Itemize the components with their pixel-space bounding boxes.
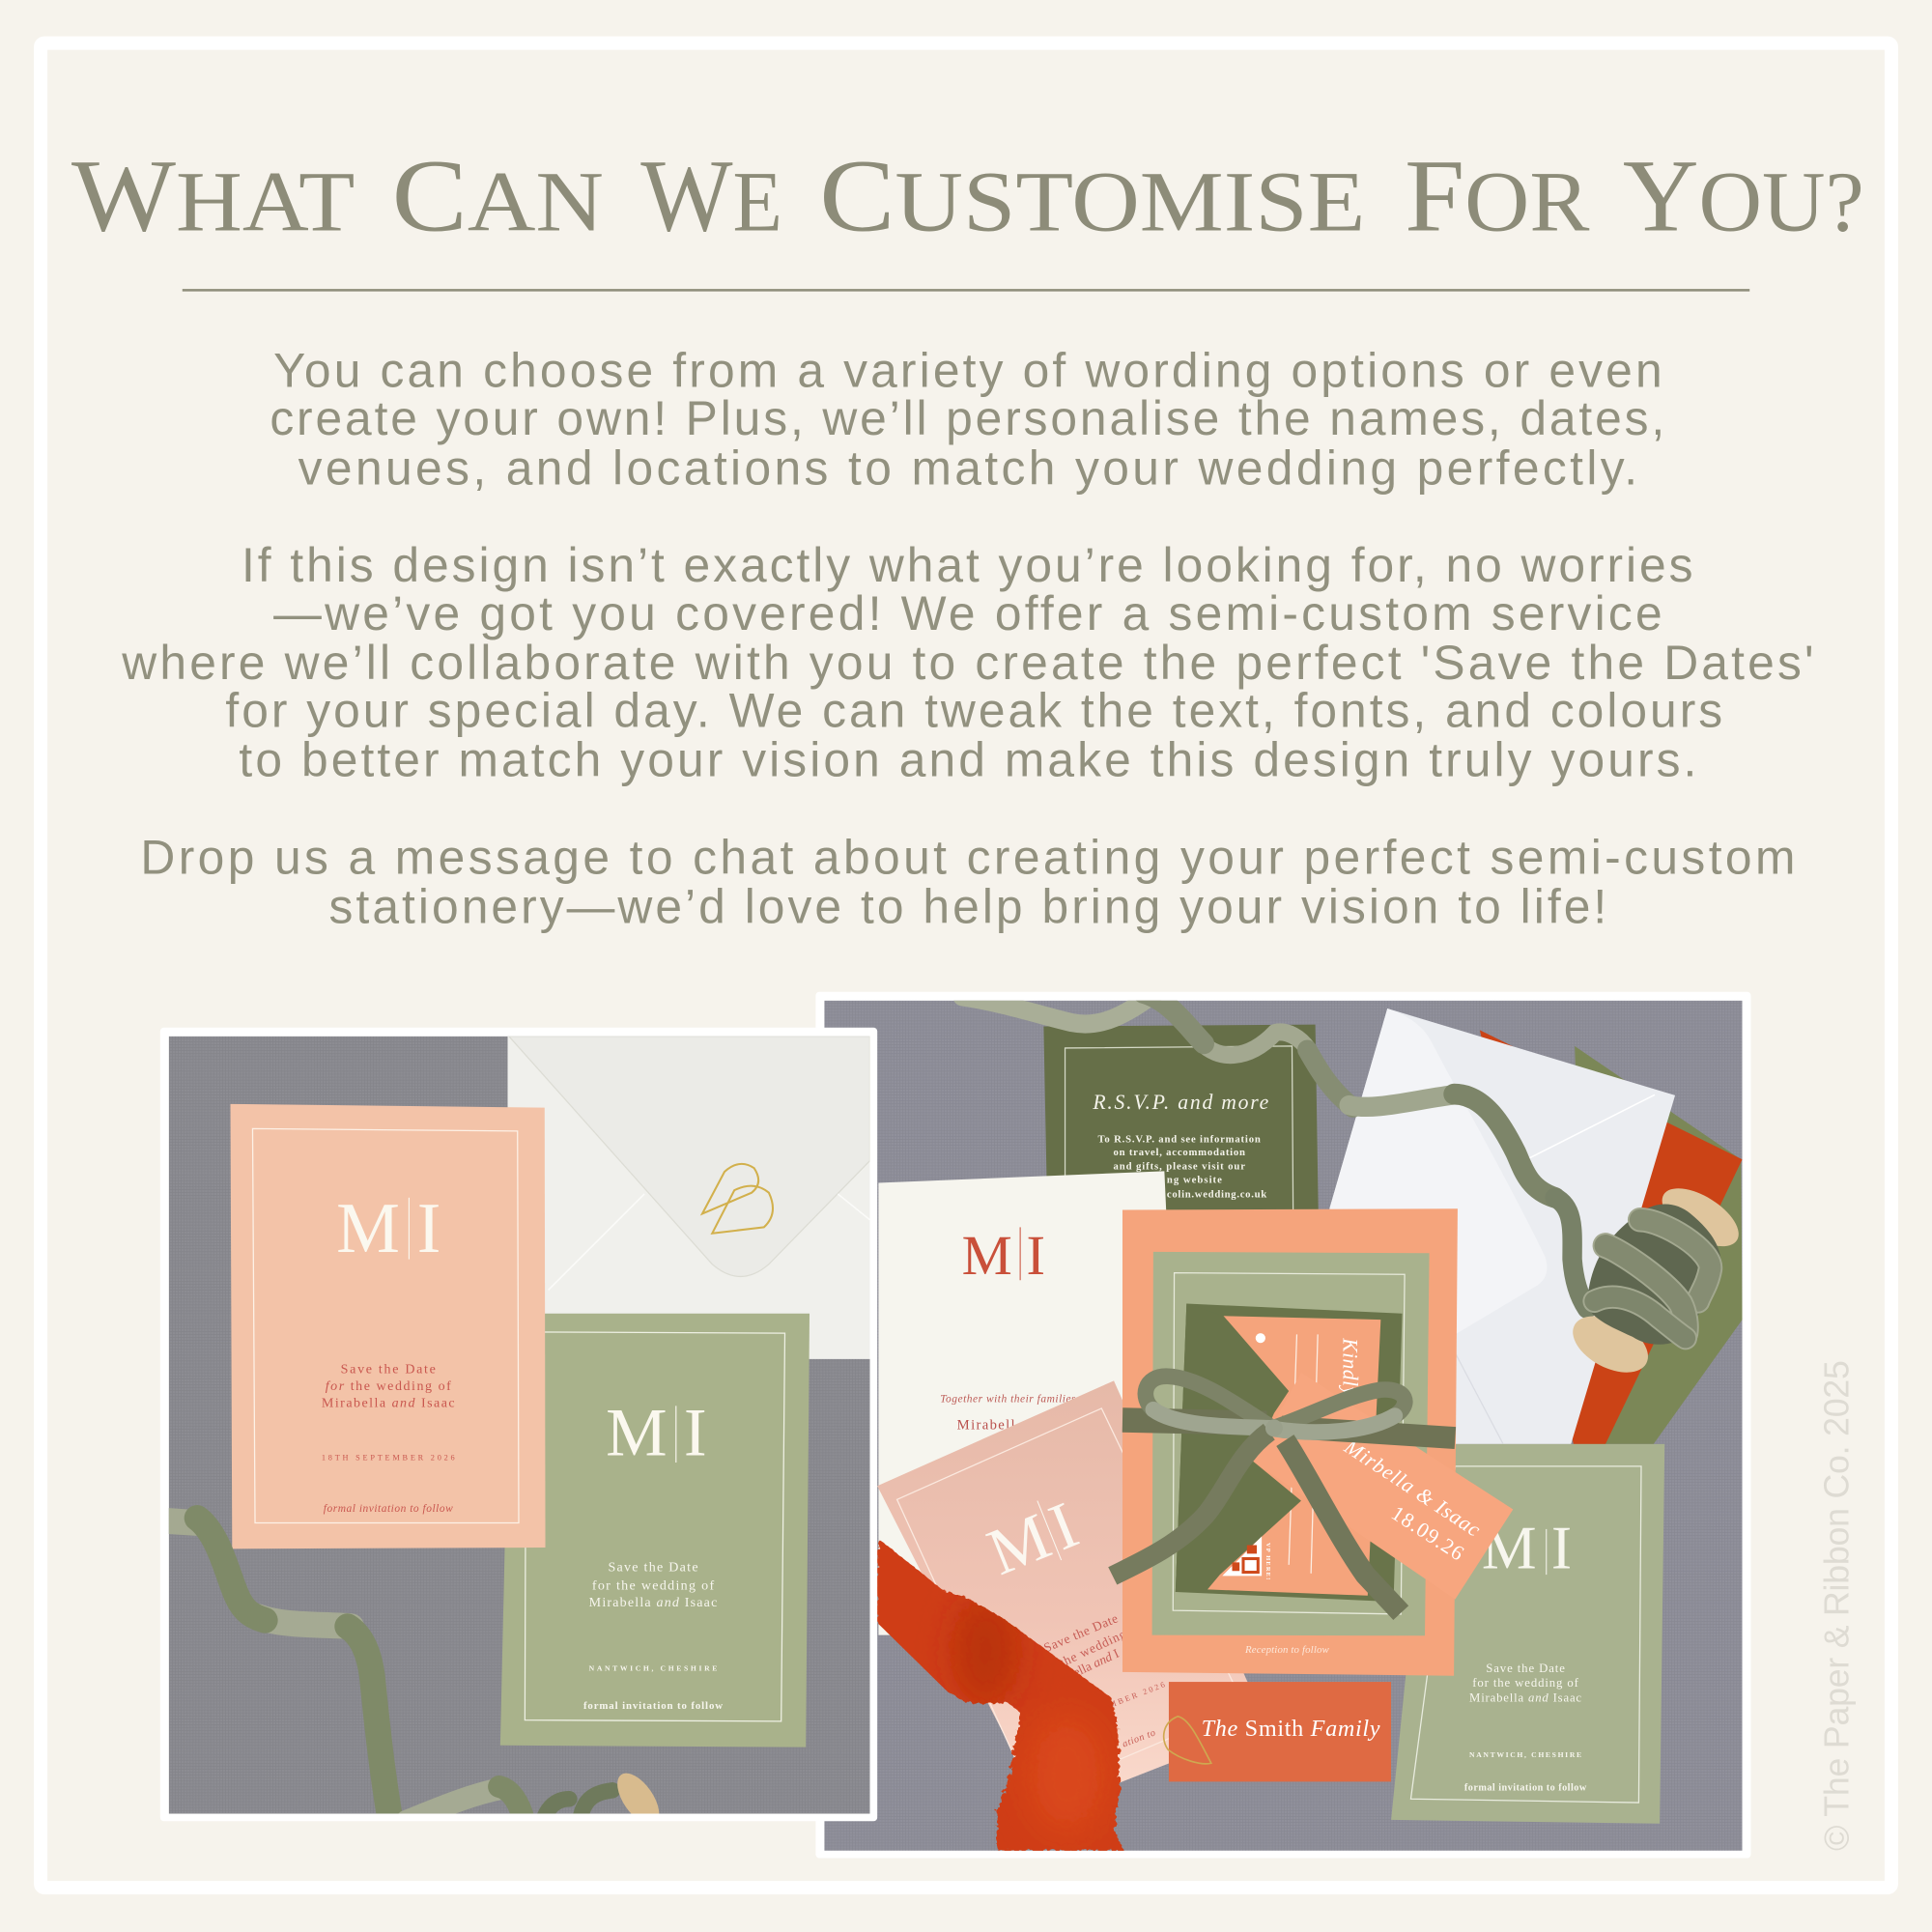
copyright watermark: © The Paper & Ribbon Co. 2025	[1817, 1360, 1856, 1851]
white invitation card: M	[962, 1224, 1012, 1287]
sage save the date card: Save the Date	[1486, 1662, 1565, 1675]
white envelope	[1329, 1009, 1675, 1444]
peach save the date card: Mirabella and Isaac	[322, 1396, 455, 1411]
photo: save the date pair	[160, 1028, 877, 1832]
text block: semi-custom paragraph	[121, 538, 1814, 787]
sage save the date card: Mirabella and Isaac	[1469, 1690, 1581, 1704]
green save the date card: formal invitation to follow	[583, 1700, 723, 1712]
QR code	[1222, 1537, 1262, 1576]
title	[71, 140, 1864, 254]
RSVP card	[1043, 1025, 1319, 1213]
title divider	[183, 289, 1749, 292]
sage save the date card: NANTWICH, CHESHIRE	[1469, 1750, 1581, 1759]
green save the date card: for the wedding of	[592, 1577, 714, 1593]
dark green pocket	[1176, 1303, 1403, 1602]
dark green flap	[1176, 1303, 1301, 1592]
text block: call to action	[140, 830, 1795, 933]
orange reply insert	[1208, 1316, 1380, 1596]
title: FOR	[1405, 140, 1590, 254]
text block: intro paragraph: venues, and locations to match your wedding perfectly.	[298, 440, 1637, 495]
sage save the date card: M	[1482, 1514, 1537, 1582]
pink save the date card: the wedding	[1057, 1626, 1128, 1669]
title: CUSTOMISE	[819, 140, 1365, 254]
orange backing card	[1122, 1208, 1458, 1676]
place card: The Smith Family	[1202, 1716, 1380, 1742]
text block: semi-custom paragraph: to better match your vision and make this design truly yours.	[239, 733, 1696, 787]
RSVP card: on travel, accommodation	[1114, 1147, 1245, 1158]
RSVP card: ng website	[1167, 1174, 1222, 1185]
text block: semi-custom paragraph: —we’ve got you covered! We offer a semi-custom service	[273, 586, 1662, 640]
red envelope	[1480, 1030, 1743, 1444]
ribbon spool	[1573, 1188, 1739, 1373]
pink save the date card: MBER 2026	[1108, 1680, 1166, 1710]
wooden spool	[617, 1774, 659, 1814]
top velvet ribbon	[962, 993, 1587, 1309]
RSVP card: To R.S.V.P. and see information	[1097, 1133, 1261, 1145]
peach save the date card: for the wedding of	[326, 1378, 451, 1394]
orange reply insert: VP HERE!	[1264, 1543, 1271, 1579]
green save the date card	[500, 1314, 810, 1747]
photo: full stationery suite	[815, 992, 1750, 1858]
reception caption: Reception to follow	[1244, 1644, 1330, 1656]
gold paper clips	[702, 1164, 773, 1234]
pink save the date card: ation to	[1121, 1727, 1157, 1749]
pink save the date card: Save the Date	[1041, 1610, 1120, 1655]
peach save the date card	[231, 1104, 546, 1548]
red silk ribbon	[877, 1538, 1123, 1851]
sage save the date card	[1391, 1444, 1664, 1824]
text block: intro paragraph: You can choose from a variety of wording options or even	[273, 344, 1662, 398]
green save the date card: Mirabella and Isaac	[589, 1595, 717, 1610]
pink save the date card: ella and I	[1070, 1646, 1122, 1680]
green envelope	[1575, 1046, 1743, 1444]
peach name tag: Mirbella & Isaac	[1340, 1435, 1485, 1542]
peach save the date card: 18TH SEPTEMBER 2026	[322, 1453, 455, 1462]
sage layered card	[1152, 1252, 1430, 1635]
velvet ribbon	[160, 1518, 392, 1829]
text block: intro paragraph: create your own! Plus, we’ll personalise the names, dates,	[270, 391, 1664, 445]
white invitation card: Mirabell	[957, 1418, 1015, 1434]
white invitation card	[878, 1171, 1185, 1635]
green save the date card: I	[684, 1394, 707, 1470]
peach save the date card: Save the Date	[341, 1362, 436, 1378]
pink save the date card: I	[1039, 1488, 1088, 1564]
sage save the date card: I	[1551, 1514, 1572, 1582]
text block: call to action: Drop us a message to chat about creating your perfect semi-custom	[140, 830, 1795, 884]
green save the date card: NANTWICH, CHESHIRE	[589, 1664, 717, 1673]
RSVP card: and gifts, please visit our	[1114, 1160, 1245, 1172]
text block: semi-custom paragraph: If this design isn’t exactly what you’re looking for, no worries	[242, 538, 1693, 592]
text block: call to action: stationery—we’d love to help bring your vision to life!	[329, 879, 1606, 933]
text block: semi-custom paragraph: where we’ll collaborate with you to create the perfect 'Save the Dates'	[121, 636, 1814, 690]
title: CAN	[392, 140, 604, 254]
white envelope	[508, 1037, 870, 1359]
white invitation card: Together with their families	[940, 1394, 1076, 1406]
place card	[1164, 1682, 1391, 1781]
velvet ribbon lower loop	[407, 1786, 612, 1826]
peach save the date card: I	[417, 1189, 440, 1268]
title: WHAT	[71, 140, 355, 254]
sage save the date card: for the wedding of	[1472, 1676, 1579, 1690]
title: WE	[640, 140, 782, 254]
text block: intro paragraph	[270, 344, 1664, 495]
text block: semi-custom paragraph: for your special day. We can tweak the text, fonts, and colours	[225, 684, 1722, 738]
peach name tag: 18.09.26	[1387, 1501, 1468, 1565]
RSVP card: colin.wedding.co.uk	[1167, 1188, 1266, 1200]
green save the date card: M	[606, 1394, 668, 1470]
pink save the date card: M	[978, 1499, 1060, 1589]
orange reply insert: Kindly	[1338, 1337, 1361, 1397]
green save the date card: Save the Date	[608, 1559, 698, 1575]
white invitation card: I	[1026, 1224, 1045, 1287]
pink save the date card	[877, 1381, 1248, 1783]
peach name tag	[1253, 1373, 1513, 1600]
peach save the date card: M	[336, 1189, 400, 1268]
RSVP card: R.S.V.P. and more	[1092, 1091, 1269, 1114]
sage save the date card: formal invitation to follow	[1464, 1782, 1587, 1793]
peach save the date card: formal invitation to follow	[324, 1503, 453, 1515]
title: YOU?	[1623, 140, 1864, 254]
velvet bow	[1113, 1377, 1455, 1613]
